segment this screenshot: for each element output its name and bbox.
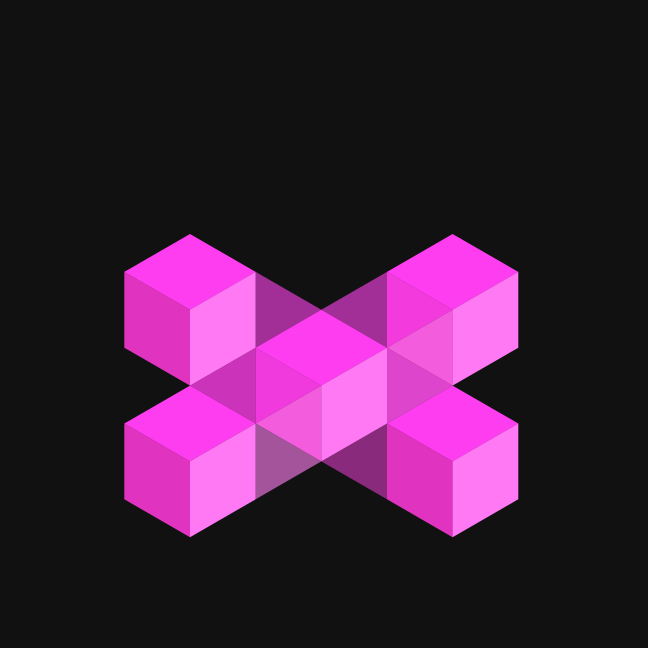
cube: center [256,310,387,461]
cube: bottom left [124,386,256,537]
cube: top right [387,234,518,386]
overlap facets: translucent connecting shapes [190,272,453,499]
cube: bottom right [387,386,518,537]
cube: top left [124,234,256,386]
